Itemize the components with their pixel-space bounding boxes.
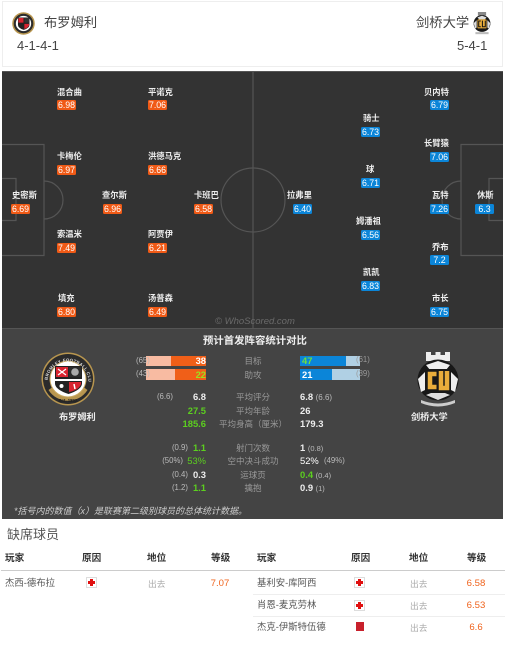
assists row (136, 369, 370, 380)
player: 贝内特 (424, 87, 449, 110)
player: 市长: 市长 (432, 293, 449, 303)
player: 卡梅伦: 6.97 (58, 165, 75, 175)
missing players table: 原因 (82, 553, 101, 564)
player: 汤普森: 6.49 (149, 307, 166, 317)
player: 姆潘祖: 姆潘祖 (356, 216, 381, 226)
player: 洪德马克 (148, 151, 181, 175)
player: 乔布: 7.2 (433, 255, 446, 265)
row: 杰西-德布拉: 杰西-德布拉 (5, 577, 55, 588)
player: 贝内特: 6.79 (431, 100, 448, 110)
missing players table: 出去 (148, 579, 165, 589)
pitch panel (2, 71, 503, 329)
stat rows: 1.1 (193, 442, 206, 453)
player: 阿贾伊: 阿贾伊 (148, 229, 173, 239)
stat rows: 6.8 (193, 391, 206, 402)
icon: Bromley crest large (42, 352, 94, 406)
icon: Cambridge crest large (418, 352, 458, 406)
player: 平诺克: 平诺克 (148, 87, 173, 97)
player: 乔布: 乔布 (432, 242, 449, 252)
player: 填充 (57, 293, 76, 317)
missing players table: 地位 (409, 553, 428, 564)
stat rows: (50%) (162, 456, 183, 465)
player: 骑士: 骑士 (363, 113, 380, 123)
stat rows: 1 (0.8) (300, 442, 323, 453)
player: 混合曲 (57, 87, 82, 110)
player: 姆潘祖 (356, 216, 381, 240)
player: 休斯: 6.3 (478, 204, 491, 214)
stat rows: 0.4 (0.4) (300, 469, 331, 480)
missing players table: 6.53 (467, 600, 485, 611)
icon: Bromley crest large: Est. 1892 (59, 398, 78, 403)
player: 索温米: 7.49 (58, 243, 75, 253)
player: 查尔斯: 6.96 (104, 204, 121, 214)
watermark: © WhoScored.com (215, 316, 295, 327)
player: 混合曲: 6.98 (58, 100, 75, 110)
stat rows: (1.2) (172, 483, 188, 492)
pitch lines (2, 72, 503, 328)
player: 球: 6.71 (362, 178, 379, 188)
player: 汤普森: 汤普森 (148, 293, 173, 303)
stat rows: (0.9) (172, 443, 188, 452)
assists row: 22 (196, 369, 206, 380)
player: 球 (361, 164, 380, 188)
away crest label: 剑桥大学 (411, 412, 448, 422)
player: 洪德马克: 洪德马克 (148, 151, 181, 161)
player: 卡班巴: 卡班巴 (194, 190, 219, 200)
stat rows: 53% (187, 455, 206, 466)
assists row: (43) (136, 369, 150, 378)
player: 填充: 填充 (58, 293, 75, 303)
player: 拉弗里: 6.40 (294, 204, 311, 214)
player: 汤普森 (148, 293, 173, 317)
player: 贝内特: 贝内特 (424, 87, 449, 97)
stats panel (2, 329, 503, 519)
player: 长臂猿 (424, 138, 449, 162)
missing players table (1, 552, 505, 633)
missing players table: 原因 (351, 553, 370, 564)
stat rows: 179.3 (300, 418, 323, 429)
icon: Bromley crest small (12, 12, 35, 35)
player: 休斯 (475, 190, 494, 214)
stat rows: 0.9 (1) (300, 482, 325, 493)
missing players table: 出去 (410, 623, 427, 633)
stat rows (157, 391, 345, 493)
stat rows: 平均年龄 (236, 406, 270, 416)
stat rows: 平均评分 (236, 392, 270, 402)
player: 卡梅伦: 卡梅伦 (57, 151, 82, 161)
player: 长臂猿: 7.06 (431, 152, 448, 162)
assists row: (39) (356, 369, 370, 378)
player: 骑士 (361, 113, 380, 137)
player: 阿贾伊: 6.21 (149, 243, 166, 253)
footnote: *括号内的数值（x）是联赛第二级别球员的总体统计数据。 (14, 506, 247, 516)
stat rows: 1.1 (193, 482, 206, 493)
player: 姆潘祖: 6.56 (362, 230, 379, 240)
stat rows: 185.6 (183, 418, 206, 429)
player: 史密斯: 史密斯 (12, 190, 37, 200)
player: 瓦特: 瓦特 (432, 190, 449, 200)
away formation: 5-4-1 (457, 38, 487, 53)
player: 卡班巴: 6.58 (195, 204, 212, 214)
player: 史密斯: 6.69 (12, 204, 29, 214)
goals row: 目标 (244, 356, 262, 366)
stat rows: 空中决斗成功 (227, 456, 278, 466)
goals row: (61) (356, 355, 370, 364)
player: 球: 球 (366, 164, 374, 174)
player: 查尔斯 (102, 190, 127, 214)
missing players table: 玩家 (5, 553, 24, 564)
player: 索温米 (57, 229, 82, 253)
missing players heading: 缺席球员 (7, 527, 59, 542)
away team name: 剑桥大学 (416, 15, 469, 30)
stat rows: 平均身高（厘米） (219, 419, 287, 429)
missing players table: 地位 (147, 553, 166, 564)
player: 填充: 6.80 (58, 307, 75, 317)
assists row: 21 (302, 369, 312, 380)
player: 平诺克: 7.06 (149, 100, 166, 110)
player: 阿贾伊 (148, 229, 173, 253)
stat rows: 52% (300, 455, 319, 466)
missing players table: 等级 (467, 553, 486, 564)
player: 混合曲: 混合曲 (57, 87, 82, 97)
player: 拉弗里: 拉弗里 (287, 190, 312, 200)
missing players table: 出去 (410, 579, 427, 589)
icon: Cambridge crest small (474, 12, 490, 34)
goals row: (65) (136, 356, 150, 365)
stat rows: (0.4) (172, 470, 188, 479)
home crest label: 布罗姆利 (59, 412, 96, 422)
player: 史密斯 (11, 190, 37, 214)
player: 长臂猿: 长臂猿 (424, 138, 449, 148)
stat rows: (6.6) (157, 392, 173, 401)
stat rows: 0.3 (193, 469, 206, 480)
player: 凯凯 (361, 267, 380, 291)
player: 洪德马克: 6.66 (149, 165, 166, 175)
player: 卡班巴 (194, 190, 219, 214)
missing players table: 等级 (211, 553, 230, 564)
missing players table: 玩家 (257, 553, 276, 564)
row: 基利安-库阿西: 基利安-库阿西 (257, 577, 316, 588)
goals row: 38 (196, 355, 206, 366)
player: 拉弗里 (287, 190, 312, 214)
player: 骑士: 6.73 (362, 127, 379, 137)
player: 索温米: 索温米 (57, 229, 82, 239)
player: 休斯: 休斯 (477, 190, 494, 200)
stats title: 预计首发阵容统计对比 (203, 336, 307, 347)
player: 瓦特 (430, 190, 449, 214)
row: 杰克-伊斯特伍德: 杰克-伊斯特伍德 (257, 621, 326, 632)
stat rows: 6.8 (6.6) (300, 391, 332, 402)
home team name: 布罗姆利 (44, 15, 97, 30)
player: 查尔斯: 查尔斯 (102, 190, 127, 200)
player: 市长: 6.75 (431, 307, 448, 317)
player: 凯凯: 6.83 (362, 281, 379, 291)
player: 凯凯: 凯凯 (363, 267, 380, 277)
assists row: 助攻 (244, 370, 262, 380)
goals row: 47 (302, 355, 312, 366)
goals row (136, 355, 370, 366)
stat rows: 26 (300, 405, 310, 416)
header panel (2, 1, 503, 67)
missing players table: 7.07 (211, 578, 229, 589)
missing players table: 6.6 (469, 622, 483, 633)
home formation: 4-1-4-1 (17, 38, 59, 53)
missing players table: 出去 (410, 601, 427, 611)
player: 乔布 (430, 242, 449, 265)
stat rows: 27.5 (188, 405, 206, 416)
player: 卡梅伦 (57, 151, 82, 175)
stat rows: 擒抱 (244, 483, 262, 493)
row: 肖恩-麦克劳林: 肖恩-麦克劳林 (257, 599, 316, 610)
player: 市长 (430, 293, 449, 317)
stat rows: 运球页 (240, 470, 266, 480)
stat rows: 射门次数 (236, 443, 270, 453)
player: 平诺克 (148, 87, 173, 110)
stat rows: (49%) (324, 456, 345, 465)
missing players table: 6.58 (467, 578, 485, 589)
player: 瓦特: 7.26 (431, 204, 448, 214)
